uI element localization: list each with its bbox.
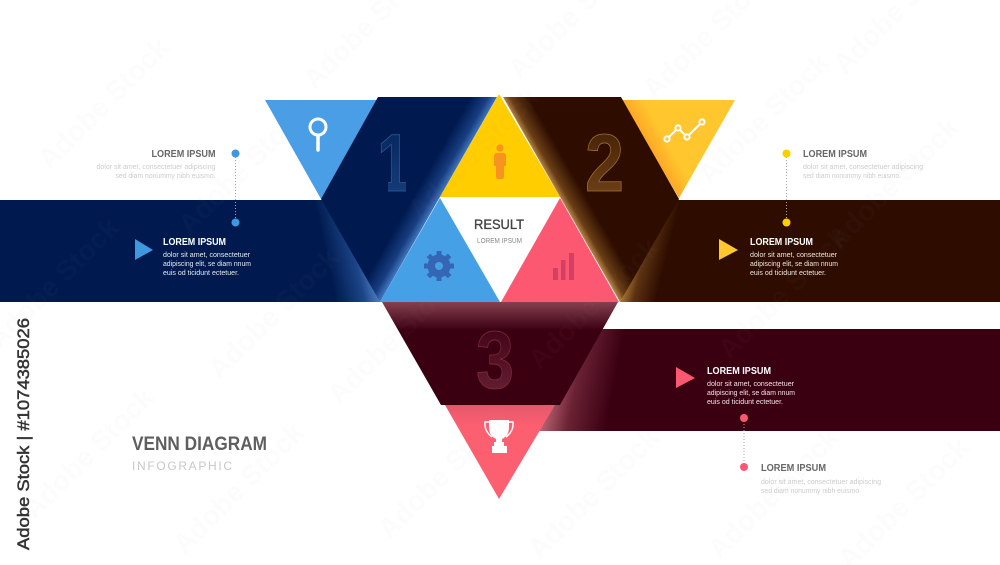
icon: pink play arrow [676, 367, 695, 388]
text: maroon band: adipiscing elit, se diam nnum [707, 390, 795, 397]
text: maroon band: dolor sit amet, consectetuer [707, 381, 795, 388]
watermarks: Adobe Stock [32, 32, 175, 175]
text: brown band [750, 237, 838, 277]
title [132, 434, 267, 473]
callout: bottom right note: sed diam nonummy nibh euismo. [761, 488, 861, 495]
blue top triangle with magnifier [265, 100, 379, 199]
watermarks: Adobe Stock [372, 402, 515, 545]
centre: pink triangle with bars [501, 198, 619, 302]
brown parallelogram with number 2: 2 [585, 118, 624, 209]
text: navy band: LOREM IPSUM [163, 237, 226, 248]
text: maroon band: euis od ticidunt ectetuer. [707, 399, 783, 406]
maroon trapezoid with number 3: 3 [476, 315, 514, 406]
title: INFOGRAPHIC [132, 459, 232, 473]
text: maroon band: LOREM IPSUM [707, 366, 771, 377]
watermarks: Adobe Stock [202, 242, 345, 385]
text: brown band: adipiscing elit, se diam nnum [750, 261, 838, 268]
callout: bottom right note [761, 463, 881, 495]
brown parallelogram with number 2 [503, 97, 679, 302]
callout: top right note: dolor sit amet, consectetuer adipiscing [803, 164, 923, 171]
centre: blue triangle with gear [380, 198, 500, 302]
text: navy band [163, 237, 251, 277]
text: brown band: LOREM IPSUM [750, 237, 813, 248]
callout: top left note [96, 149, 216, 180]
connector: blue dots [232, 150, 240, 226]
callout: top right note: sed diam nonummy nibh euismo. [803, 173, 901, 180]
title: VENN DIAGRAM [132, 434, 267, 455]
text: navy band: adipiscing elit, se diam nnum [163, 261, 251, 268]
callout: top right note [803, 149, 923, 180]
watermarks: Adobe Stock [17, 382, 160, 525]
centre: white result triangle [441, 198, 560, 301]
yellow top triangle with line chart [621, 100, 735, 198]
callout: bottom right note: LOREM IPSUM [761, 463, 826, 474]
pink bottom triangle with trophy [445, 405, 555, 499]
watermarks: Adobe Stock [322, 267, 465, 410]
watermarks: Adobe Stock [522, 232, 665, 375]
panel 1: navy band [0, 200, 381, 302]
callout: top left note: sed diam nonummy nibh euismo. [116, 173, 216, 180]
text: maroon band [707, 366, 795, 406]
navy parallelogram with number 1: 1 [377, 118, 411, 209]
centre: white result triangle: LOREM IPSUM [477, 238, 522, 245]
callout: top left note: LOREM IPSUM [152, 149, 216, 160]
maroon trapezoid with number 3 [382, 302, 618, 406]
panel 3: maroon band [538, 329, 1000, 431]
text: brown band: dolor sit amet, consectetuer [750, 252, 838, 259]
watermarks: Adobe Stock [167, 417, 310, 560]
callout: top left note: dolor sit amet, consectetuer adipiscing [96, 164, 216, 171]
panel 2: brown band [620, 200, 1000, 302]
watermarks: Adobe Stock [692, 47, 835, 190]
icon: blue play arrow [135, 239, 153, 260]
centre: white result triangle: RESULT [474, 216, 524, 232]
centre: yellow triangle with person [440, 94, 560, 197]
watermarks: Adobe Stock [712, 222, 855, 365]
watermarks: Adobe Stock [702, 422, 845, 565]
watermarks: Adobe Stock [172, 97, 315, 240]
stock id side text: Adobe Stock | #1074385026 [14, 318, 33, 550]
navy parallelogram with number 1 [321, 97, 497, 302]
text: navy band: dolor sit amet, consectetuer [163, 252, 251, 259]
text: brown band: euis od ticidunt ectetuer. [750, 270, 826, 277]
connector: yellow dots [782, 150, 790, 226]
connector: pink dots [740, 414, 748, 471]
watermarks: Adobe Stock [822, 112, 965, 255]
watermarks: Adobe Stock [522, 422, 665, 565]
callout: bottom right note: dolor sit amet, consectetuer adipiscing [761, 479, 881, 486]
icon: yellow play arrow [719, 239, 738, 260]
watermarks: Adobe Stock [402, 82, 545, 225]
text: navy band: euis od ticidunt ectetuer. [163, 270, 239, 277]
callout: top right note: LOREM IPSUM [803, 149, 867, 160]
